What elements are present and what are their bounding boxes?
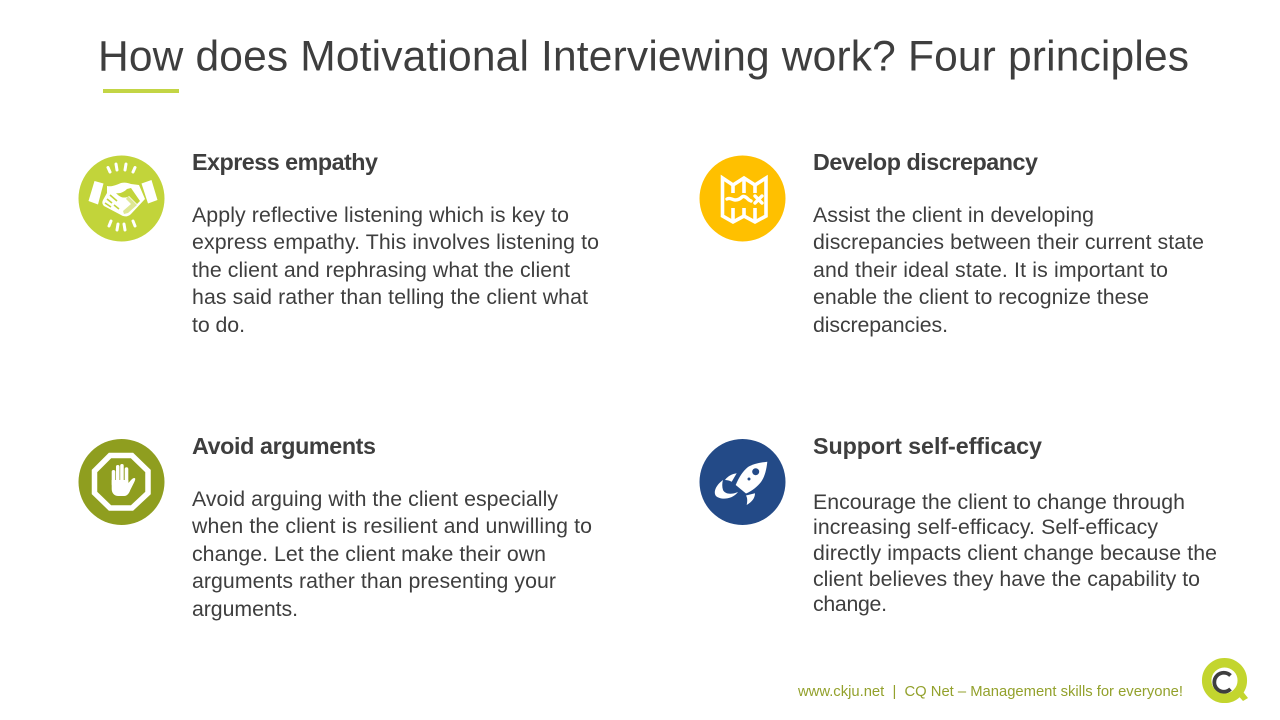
- text block: client believes they have the capability to: [813, 567, 1200, 591]
- text block: enable the client to recognize these: [813, 285, 1149, 309]
- text block: [813, 203, 1204, 337]
- icon: map: [700, 156, 786, 242]
- icon: CQ logo: [1207, 663, 1248, 701]
- text block: when the client is resilient and unwilling to: [191, 514, 592, 538]
- text block: arguments.: [192, 597, 298, 621]
- text block: change.: [813, 592, 887, 616]
- text block: the client and rephrasing what the client: [192, 258, 570, 282]
- text block: express empathy. This involves listening to: [192, 230, 599, 254]
- text block: Avoid arguing with the client especially: [192, 487, 558, 511]
- panel: develop discrepancy: [700, 149, 1204, 337]
- text block: arguments rather than presenting your: [192, 569, 556, 593]
- text block: to do.: [192, 313, 245, 337]
- footer text: www.ckju.net | CQ Net – Management skills for everyone!: [797, 684, 1183, 700]
- icon: stop hand: [78, 439, 164, 525]
- text block: [192, 203, 599, 337]
- text block: and their ideal state. It is important to: [813, 258, 1168, 282]
- text block: Assist the client in developing: [813, 203, 1094, 227]
- panel: express empathy: [78, 149, 599, 337]
- heading: Support self-efficacy: [813, 433, 1042, 459]
- text block: change. Let the client make their own: [192, 542, 546, 566]
- text block: discrepancies.: [813, 313, 948, 337]
- heading: Express empathy: [192, 149, 378, 175]
- icon: rocket: [700, 439, 786, 525]
- text block: directly impacts client change because the: [813, 541, 1217, 565]
- title: How does Motivational Interviewing work? Four principles: [98, 34, 1189, 80]
- panel: avoid arguments: [78, 433, 592, 621]
- icon: handshake: [78, 156, 164, 242]
- heading: Avoid arguments: [192, 433, 376, 459]
- text block: increasing self-efficacy. Self-efficacy: [813, 515, 1158, 539]
- text block: discrepancies between their current state: [813, 230, 1204, 254]
- title underline: [103, 89, 179, 93]
- panel: support self-efficacy: [700, 433, 1217, 616]
- text block: [191, 487, 592, 621]
- text block: [813, 490, 1217, 616]
- text block: Apply reflective listening which is key to: [192, 203, 569, 227]
- heading: Develop discrepancy: [813, 149, 1038, 175]
- text block: has said rather than telling the client what: [192, 285, 588, 309]
- text block: Encourage the client to change through: [813, 490, 1185, 514]
